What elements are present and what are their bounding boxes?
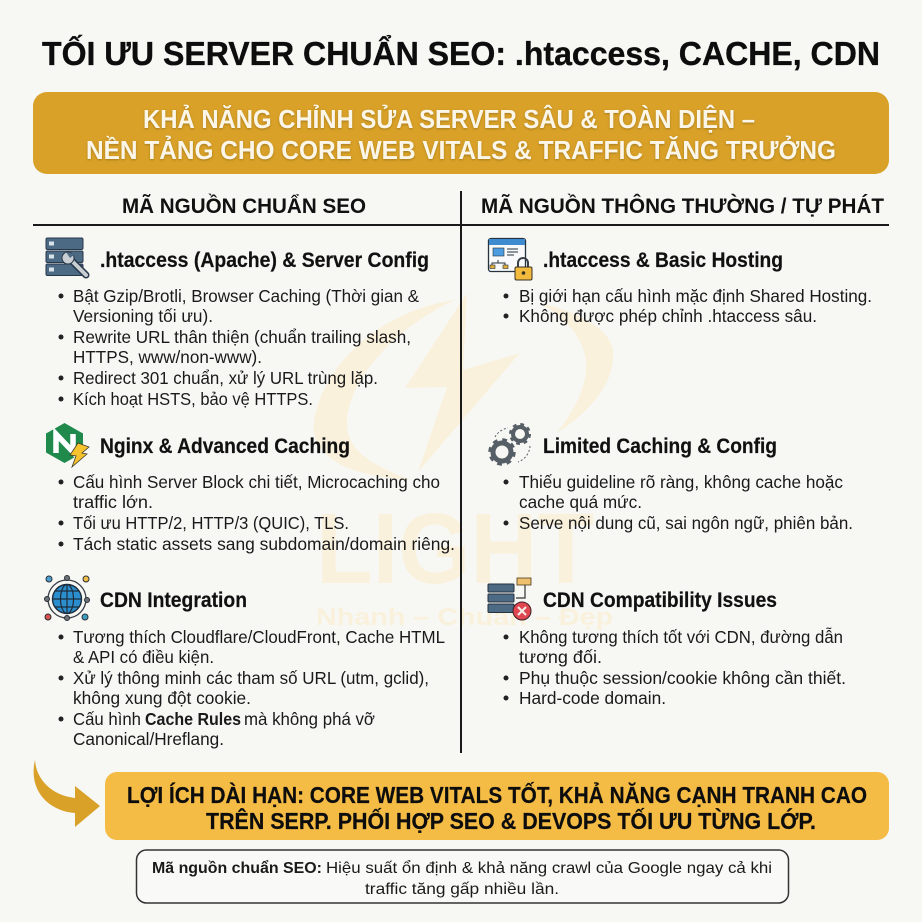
bullet list: Cấu hình (73, 709, 141, 729)
bullet list: Tương thích Cloudflare/CloudFront, Cache HTML (73, 627, 445, 647)
bullet list: mà không phá vỡ (244, 709, 375, 729)
section: CDN Integration (44, 576, 445, 749)
callout: long-term benefit: LỢI ÍCH DÀI HẠN: CORE WEB VITALS TỐT, KHẢ NĂNG CẠNH TRANH CAO (127, 780, 867, 808)
bullet list: cache quá mức. (519, 492, 642, 512)
heading: Nginx & Advanced Caching (100, 435, 350, 458)
bullet list (504, 286, 872, 326)
bullet list: Rewrite URL thân thiện (chuẩn trailing slash, (73, 327, 411, 347)
banner: headline: KHẢ NĂNG CHỈNH SỬA SERVER SÂU & TOÀN DIỆN – (143, 103, 755, 134)
title: TỐI ƯU SERVER CHUẨN SEO: .htaccess, CACHE, CDN (42, 34, 880, 73)
panel: right column (488, 238, 872, 708)
column heading: left: MÃ NGUỒN CHUẨN SEO (122, 194, 366, 218)
bullet list: Thiếu guideline rõ ràng, không cache hoặc (519, 472, 843, 492)
watermark: LIGHT logo: Nhanh – Chuẩn – Đẹp (316, 604, 613, 631)
section: .htaccess basic hosting (488, 238, 872, 326)
bullet list: traffic lớn. (73, 492, 153, 512)
bullet list: Bật Gzip/Brotli, Browser Caching (Thời gian & (73, 286, 419, 306)
section: Nginx (46, 423, 455, 554)
bullet list: Serve nội dung cũ, sai ngôn ngữ, phiên bản. (519, 513, 853, 533)
bullet list (58, 627, 445, 749)
bullet list: không xung đột cookie. (73, 688, 251, 708)
bullet list: Tối ưu HTTP/2, HTTP/3 (QUIC), TLS. (73, 513, 349, 533)
bullet list: Phụ thuộc session/cookie không cần thiết. (519, 668, 846, 688)
bullet list: Tách static assets sang subdomain/domain riêng. (73, 534, 455, 554)
icon: server with error (488, 578, 531, 620)
heading: CDN Compatibility Issues (543, 589, 777, 612)
column heading: right: MÃ NGUỒN THÔNG THƯỜNG / TỰ PHÁT (481, 194, 884, 218)
bullet list: Không được phép chỉnh .htaccess sâu. (519, 306, 817, 326)
heading: .htaccess & Basic Hosting (543, 249, 783, 272)
bullet list: Hard-code domain. (519, 688, 666, 708)
callout: long-term benefit: TRÊN SERP. PHỐI HỢP SEO & DEVOPS TỐI ƯU TỪNG LỚP. (206, 807, 816, 834)
bullet list: Bị giới hạn cấu hình mặc định Shared Hosting. (519, 286, 872, 306)
heading: .htaccess (Apache) & Server Config (100, 249, 429, 272)
bullet list: Versioning tối ưu). (73, 306, 213, 326)
icon: gears (490, 424, 530, 464)
watermark: LIGHT logo: LIGHT (316, 493, 594, 605)
bullet list (58, 472, 455, 554)
icon: nginx hexagon with bolt (46, 423, 89, 467)
note box: traffic tăng gấp nhiều lần. (365, 881, 559, 898)
note box: Mã nguồn chuẩn SEO: (152, 859, 322, 877)
bullet list: Xử lý thông minh các tham số URL (utm, gclid), (73, 668, 429, 688)
bullet list: HTTPS, www/non-www). (73, 347, 262, 367)
heading: CDN Integration (100, 589, 247, 612)
arrow: curved gold (34, 760, 100, 827)
heading: Limited Caching & Config (543, 435, 777, 458)
banner: headline (33, 92, 889, 174)
callout: long-term benefit (105, 772, 889, 840)
icon: server with wrench (46, 238, 86, 276)
icon: globe network (44, 576, 90, 620)
bullet list: Cấu hình Server Block chi tiết, Microcaching cho (73, 472, 440, 492)
panel: left column (44, 238, 455, 749)
bullet list: Kích hoạt HSTS, bảo vệ HTTPS. (73, 389, 313, 409)
bullet list: Canonical/Hreflang. (73, 729, 224, 749)
icon: browser window with lock (488, 238, 532, 280)
section: CDN compatibility (488, 578, 846, 708)
section: .htaccess Apache (46, 238, 429, 409)
banner: headline: NỀN TẢNG CHO CORE WEB VITALS & TRAFFIC TĂNG TRƯỞNG (86, 134, 836, 165)
bullet list: & API có điều kiện. (73, 647, 214, 667)
note box (136, 850, 788, 903)
watermark: LIGHT logo (314, 293, 613, 631)
bullet list (58, 286, 419, 409)
section: limited caching (490, 424, 853, 533)
bullet list: tương đối. (519, 647, 602, 667)
bullet list: Cache Rules (145, 709, 241, 729)
bullet list: Redirect 301 chuẩn, xử lý URL trùng lặp. (73, 368, 378, 388)
bullet list (504, 472, 853, 533)
bullet list: Không tương thích tốt với CDN, đường dẫn (519, 626, 843, 647)
bullet list (504, 626, 846, 708)
note box: Hiệu suất ổn định & khả năng crawl của Google ngay cả khi (326, 859, 772, 877)
